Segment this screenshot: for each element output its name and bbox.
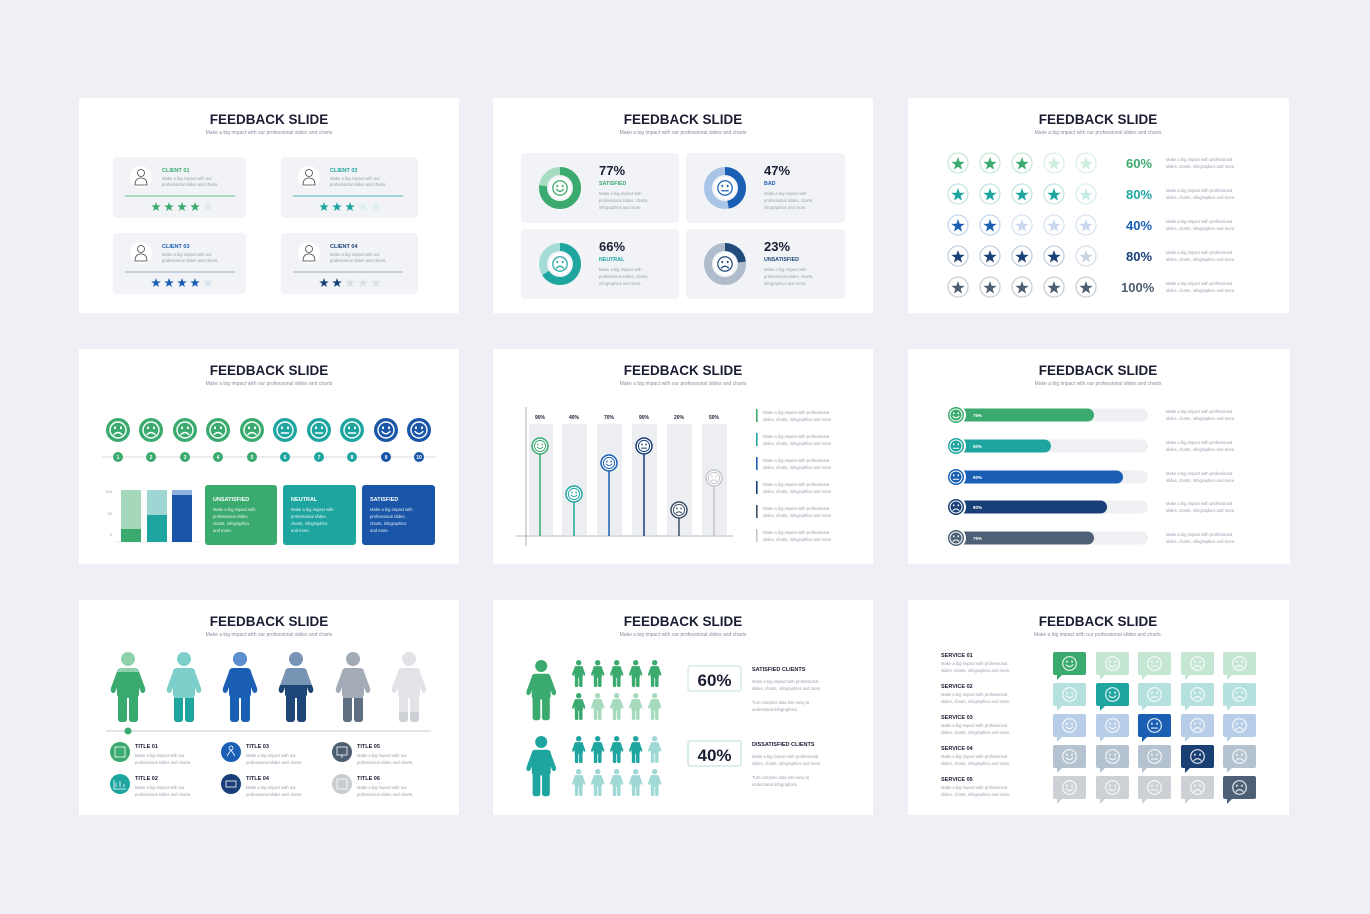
subtitle: Make a big impact with our professional slides and charts (206, 632, 333, 638)
card: 66% neutral: infographics and more. (599, 281, 642, 286)
card: client 04: CLIENT 04 (330, 244, 358, 250)
service labels: slides, charts, infographics and more. (941, 730, 1010, 735)
slide 1: client ratings (79, 98, 459, 313)
lollipop chart: 50% (709, 415, 720, 421)
descriptions: Make a big impact with professional (1166, 532, 1232, 537)
stat: 60%: Turn complex data into easy to (752, 700, 810, 705)
card: 77% satisfied: professional slides, charts, (599, 198, 648, 203)
title items: Make a big impact with our (246, 753, 296, 758)
legend text: slides, charts, infographics and more. (763, 513, 832, 518)
box: satisfied: charts, infographics (370, 521, 406, 526)
box: neutral: NEUTRAL (291, 497, 318, 503)
slide 2: donut charts (493, 98, 873, 313)
title items (110, 742, 413, 797)
slide 9: service ratings grid (908, 600, 1289, 815)
card: 47% bad: 47% (764, 163, 790, 178)
card: 66% neutral: professional slides, charts, (599, 274, 648, 279)
row: 40%: Make a big impact with professional (1166, 219, 1232, 224)
card: client 01: Make a big impact with our (162, 176, 212, 181)
card: client 04: Make a big impact with our (330, 252, 380, 257)
title items: professional slides and charts. (135, 760, 191, 765)
row: 100%: slides, charts, infographics and more. (1166, 288, 1235, 293)
descriptions: slides, charts, infographics and more. (1166, 539, 1235, 544)
service labels: SERVICE 03 (941, 715, 973, 721)
title: FEEDBACK SLIDE (624, 112, 742, 127)
pictogram: satisfied (526, 660, 661, 720)
service labels: Make a big impact with professional (941, 661, 1007, 666)
row: 80% navy: Make a big impact with professional (1166, 250, 1232, 255)
stat: 60%: slides, charts, infographics and more. (752, 686, 821, 691)
box: satisfied: professional slides, (370, 514, 406, 519)
card: client 03 (113, 233, 246, 294)
lollipop chart: 40% (569, 415, 580, 421)
legend text: slides, charts, infographics and more. (763, 441, 832, 446)
stacked bar chart: 50 (108, 511, 113, 516)
slide 5: lollipop chart (493, 349, 873, 564)
stacked bar chart: 0 (110, 532, 113, 537)
progress bars: 50% (973, 444, 982, 449)
row: 100%: 100% (1121, 280, 1155, 295)
people row (111, 652, 426, 722)
box: unsatisfied: UNSATISFIED (213, 497, 249, 503)
lollipop chart: 20% (674, 415, 685, 421)
card: client 01: CLIENT 01 (162, 168, 190, 174)
card: client 04: professional slides and charts. (330, 258, 386, 263)
card: 23% unsatisfied: 23% (764, 239, 790, 254)
title items: professional slides and charts. (357, 760, 413, 765)
card: client 04 (281, 233, 418, 294)
progress bars: 80% (973, 505, 982, 510)
service labels: SERVICE 01 (941, 653, 973, 659)
stat: 40%: Make a big impact with professional (752, 754, 818, 759)
service labels: SERVICE 05 (941, 777, 973, 783)
title items: professional slides and charts. (135, 792, 191, 797)
stat: 60%: understand infographics. (752, 707, 798, 712)
legend text: slides, charts, infographics and more. (763, 537, 832, 542)
card: 77% satisfied: SATISFIED (599, 181, 626, 187)
title items: professional slides and charts. (246, 760, 302, 765)
legend text: slides, charts, infographics and more. (763, 465, 832, 470)
subtitle: Make a big impact with our professional slides and charts (206, 130, 333, 136)
stat: 40%: 40% (697, 746, 732, 765)
lollipop chart (516, 407, 733, 546)
row: 40% (948, 215, 1235, 235)
title items: TITLE 03 (246, 744, 269, 750)
title items: Make a big impact with our (357, 753, 407, 758)
title items: TITLE 04 (246, 776, 270, 782)
face scale 1-10: 3 (184, 455, 187, 461)
row: 60% (948, 153, 1235, 173)
service labels: Make a big impact with professional (941, 785, 1007, 790)
stat: 40%: Turn complex data into easy to (752, 775, 810, 780)
service labels: SERVICE 02 (941, 684, 973, 690)
box: neutral: charts, infographics (291, 521, 327, 526)
service labels: slides, charts, infographics and more. (941, 668, 1010, 673)
title: FEEDBACK SLIDE (1039, 112, 1157, 127)
title: FEEDBACK SLIDE (624, 614, 742, 629)
subtitle: Make a big impact with our professional slides and charts (620, 632, 747, 638)
title items: Make a big impact with our (135, 785, 185, 790)
descriptions: Make a big impact with professional (1166, 409, 1232, 414)
subtitle: Make a big impact with our professional slides and charts (1035, 381, 1162, 387)
progress bars: 90% (973, 475, 982, 480)
row: 100% (948, 277, 1235, 297)
row: 80% teal: 80% (1126, 187, 1152, 202)
row: 60%: slides, charts, infographics and more. (1166, 164, 1235, 169)
row: 40%: 40% (1126, 218, 1152, 233)
slide 4: 1-10 scale (79, 349, 459, 564)
card: 47% bad: professional slides, charts, (764, 198, 813, 203)
card: 66% neutral: Make a big impact with (599, 267, 642, 272)
card: 66% neutral: NEUTRAL (599, 257, 625, 263)
row: 60%: Make a big impact with professional (1166, 157, 1232, 162)
card: 23% unsatisfied: professional slides, charts, (764, 274, 813, 279)
legend text: Make a big impact with professional (763, 530, 829, 535)
subtitle: Make a big impact with our professional slides and charts (1035, 130, 1162, 136)
title items: TITLE 02 (135, 776, 158, 782)
title items: Make a big impact with our (246, 785, 296, 790)
progress bars: 75% (973, 536, 982, 541)
service labels (941, 653, 1010, 797)
row: 100%: Make a big impact with professional (1166, 281, 1232, 286)
service labels: SERVICE 04 (941, 746, 974, 752)
progress bars: 75% (973, 413, 982, 418)
legend text: Make a big impact with professional (763, 506, 829, 511)
service labels: slides, charts, infographics and more. (941, 761, 1010, 766)
legend text: Make a big impact with professional (763, 410, 829, 415)
progress bars (946, 406, 1148, 547)
card: 23% unsatisfied (686, 229, 845, 299)
stacked bar chart (105, 489, 199, 542)
box: unsatisfied (205, 485, 277, 545)
card: client 01: professional slides and charts. (162, 182, 218, 187)
slide 8: satisfied vs dissatisfied clients (493, 600, 873, 815)
box: satisfied: SATISFIED (370, 497, 398, 503)
box: neutral: Make a big impact with (291, 507, 334, 512)
descriptions (1166, 409, 1235, 544)
title: FEEDBACK SLIDE (1039, 614, 1157, 629)
service labels: slides, charts, infographics and more. (941, 792, 1010, 797)
card: client 03: CLIENT 03 (162, 244, 190, 250)
legend text: slides, charts, infographics and more. (763, 417, 832, 422)
descriptions: slides, charts, infographics and more. (1166, 416, 1235, 421)
descriptions: Make a big impact with professional (1166, 471, 1232, 476)
title: FEEDBACK SLIDE (210, 112, 328, 127)
card: client 01 (113, 157, 246, 218)
title items: Make a big impact with our (135, 753, 185, 758)
descriptions: Make a big impact with professional (1166, 501, 1232, 506)
title items: Make a big impact with our (357, 785, 407, 790)
row: 80% navy: slides, charts, infographics and more. (1166, 257, 1235, 262)
title items: professional slides and charts. (357, 792, 413, 797)
card: 23% unsatisfied: UNSATISFIED (764, 257, 799, 263)
box: satisfied (362, 485, 435, 545)
face scale 1-10: 7 (318, 455, 321, 461)
title: FEEDBACK SLIDE (1039, 363, 1157, 378)
pictogram: dissatisfied (526, 736, 661, 796)
subtitle: Make a big impact with our professional slides and charts (206, 381, 333, 387)
stat: 40% (688, 741, 821, 787)
card: 47% bad (686, 153, 845, 223)
stat: 60%: SATISFIED CLIENTS (752, 667, 806, 673)
service labels: slides, charts, infographics and more. (941, 699, 1010, 704)
box: satisfied: and more. (370, 528, 389, 533)
face scale 1-10 (106, 418, 431, 462)
card: 47% bad: BAD (764, 181, 776, 187)
legend text: Make a big impact with professional (763, 458, 829, 463)
card: 23% unsatisfied: Make a big impact with (764, 267, 807, 272)
title: FEEDBACK SLIDE (210, 363, 328, 378)
box: neutral: professional slides, (291, 514, 327, 519)
subtitle: Make a big impact with our professional slides and charts (620, 381, 747, 387)
card: 77% satisfied: 77% (599, 163, 625, 178)
card: 77% satisfied: Make a big impact with (599, 191, 642, 196)
box: unsatisfied: charts, infographics (213, 521, 249, 526)
slide 6: progress bars (908, 349, 1290, 564)
legend text (756, 409, 832, 542)
title items: TITLE 06 (357, 776, 380, 782)
card: client 02: CLIENT 02 (330, 168, 358, 174)
subtitle: Make a big impact with our professional slides and charts (620, 130, 747, 136)
box: unsatisfied: professional slides, (213, 514, 249, 519)
lollipop chart: 90% (639, 415, 650, 421)
row: 80% teal: slides, charts, infographics and more. (1166, 195, 1235, 200)
lollipop chart: 90% (535, 415, 546, 421)
service labels: Make a big impact with professional (941, 692, 1007, 697)
face scale 1-10: 6 (284, 455, 287, 461)
service labels: Make a big impact with professional (941, 754, 1007, 759)
row: 80% navy (948, 246, 1235, 266)
card: client 02: professional slides and charts. (330, 182, 386, 187)
lollipop chart: 70% (604, 415, 615, 421)
stacked bar chart: 100 (105, 489, 113, 494)
card: client 03: professional slides and charts. (162, 258, 218, 263)
descriptions: slides, charts, infographics and more. (1166, 447, 1235, 452)
face scale 1-10: 9 (385, 455, 388, 461)
card: 77% satisfied: infographics and more. (599, 205, 642, 210)
box: neutral: and more. (291, 528, 310, 533)
title: FEEDBACK SLIDE (624, 363, 742, 378)
title items: TITLE 05 (357, 744, 380, 750)
box: unsatisfied: Make a big impact with (213, 507, 256, 512)
row: 40%: slides, charts, infographics and more. (1166, 226, 1235, 231)
row: 60%: 60% (1126, 156, 1152, 171)
card: 66% neutral: 66% (599, 239, 625, 254)
face scale 1-10: 1 (117, 455, 120, 461)
stat: 60%: Make a big impact with professional (752, 679, 818, 684)
card: client 02 (281, 157, 418, 218)
card: client 02: Make a big impact with our (330, 176, 380, 181)
bubble grid (1053, 652, 1256, 804)
card: 77% satisfied (521, 153, 679, 223)
slide 3: star rows (908, 98, 1289, 313)
descriptions: slides, charts, infographics and more. (1166, 478, 1235, 483)
descriptions: slides, charts, infographics and more. (1166, 508, 1235, 513)
stat: 40%: slides, charts, infographics and more. (752, 761, 821, 766)
title: FEEDBACK SLIDE (210, 614, 328, 629)
descriptions: Make a big impact with professional (1166, 440, 1232, 445)
card: 47% bad: infographics and more. (764, 205, 807, 210)
slider dot (124, 728, 132, 734)
face scale 1-10: 8 (351, 455, 354, 461)
card: 23% unsatisfied: infographics and more. (764, 281, 807, 286)
row: 80% navy: 80% (1126, 249, 1152, 264)
face scale 1-10: 4 (217, 455, 220, 461)
title items: professional slides and charts. (246, 792, 302, 797)
service labels: Make a big impact with professional (941, 723, 1007, 728)
stat: 40%: DISSATISFIED CLIENTS (752, 742, 815, 748)
card: client 03: Make a big impact with our (162, 252, 212, 257)
legend text: Make a big impact with professional (763, 482, 829, 487)
box: satisfied: Make a big impact with (370, 507, 413, 512)
box: unsatisfied: and more. (213, 528, 232, 533)
row: 80% teal: Make a big impact with professional (1166, 188, 1232, 193)
box: neutral (283, 485, 356, 545)
legend text: slides, charts, infographics and more. (763, 489, 832, 494)
slide 7: people figures (79, 600, 459, 815)
stat: 60%: 60% (697, 671, 732, 690)
subtitle: Make a big impact with our professional slides and charts. (1034, 632, 1162, 638)
legend text: Make a big impact with professional (763, 434, 829, 439)
row: 80% teal (948, 184, 1235, 204)
stat: 40%: understand infographics. (752, 782, 798, 787)
card: 66% neutral (521, 229, 679, 299)
face scale 1-10: 2 (150, 455, 153, 461)
stat: 60% (688, 666, 821, 712)
face scale 1-10: 5 (251, 455, 254, 461)
title items: TITLE 01 (135, 744, 158, 750)
card: 47% bad: Make a big impact with (764, 191, 807, 196)
face scale 1-10: 10 (416, 455, 422, 461)
